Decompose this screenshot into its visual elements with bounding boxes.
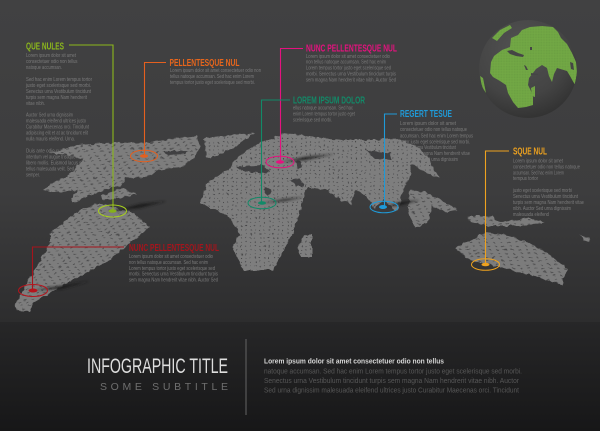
pin ring bbox=[266, 156, 294, 168]
body text bbox=[170, 68, 261, 86]
pin ring bbox=[130, 150, 158, 162]
shadow bbox=[385, 200, 420, 207]
callout text: que nules body: interdum vel augue tristique Nam bbox=[26, 154, 85, 160]
globe sphere bbox=[479, 20, 577, 118]
pin ring bbox=[18, 284, 48, 296]
callout text: que nules body: turpis sem magna Nam hendrerit bbox=[26, 95, 88, 101]
callout text: sque nul body: Senectus urna Vestibulum tincidunt bbox=[513, 194, 579, 200]
leader line bbox=[32, 247, 124, 290]
heading: REGERT TESUE bbox=[400, 109, 452, 120]
callout: nunc pellentesque nul bbox=[266, 44, 397, 168]
body text: enim Lorem tempus tortor justo eget bbox=[293, 111, 355, 117]
callout: que nules bbox=[26, 42, 167, 217]
pin dot bbox=[258, 201, 266, 205]
callout text: que nules body: Duis ante odio cursus et bbox=[26, 148, 75, 154]
pin dot bbox=[28, 288, 38, 292]
footer text heading: Lorem ipsum dolor sit amet consectetuer odio non tellus bbox=[264, 356, 444, 366]
pin ring bbox=[98, 205, 126, 217]
callout: lorem ipsum dolor bbox=[248, 96, 366, 209]
body text: sem magna Nam hendrerit vitae nibh. Auctor Sed bbox=[129, 278, 218, 284]
body text: Lorem tempus tortor justo eget scelerisque sed bbox=[306, 66, 391, 72]
callout text: regert tesue body: accumsan. Sed hac enim Lorem tempus bbox=[400, 133, 473, 139]
body text bbox=[306, 54, 396, 83]
shadow bbox=[113, 201, 167, 211]
callout text: que nules body: libero mollis. Euismod lacus sit at bbox=[26, 160, 89, 166]
footer divider bbox=[246, 339, 247, 415]
callout text: que nules body: Senectus urna Vestibulum tincidunt bbox=[26, 89, 92, 95]
callout text: que nules body: tellus malesuada velit. Sed bbox=[26, 166, 74, 172]
callout text: que nules body bbox=[25, 53, 92, 178]
callout text: regert tesue body: tortor justo eget scelerisque sed morbi. bbox=[400, 139, 470, 145]
body text: Lorem ipsum dolor sit amet consectetuer odio bbox=[306, 54, 390, 60]
callout text: regert tesue body: Lorem ipsum dolor sit amet bbox=[400, 121, 457, 127]
leader line bbox=[384, 114, 397, 207]
leader line bbox=[144, 62, 166, 156]
map: caribbean bbox=[100, 188, 137, 200]
callout text: sque nul body: malesuada eleifend bbox=[513, 212, 549, 218]
background bbox=[0, 0, 600, 322]
body text: morbi. Senectus urna Vestibulum tincidunt turpis bbox=[306, 72, 396, 78]
map: new zealand bbox=[580, 234, 590, 242]
callout text: sque nul body bbox=[512, 158, 584, 218]
body text: Lorem ipsum dolor sit amet consectetuer odio bbox=[129, 254, 213, 260]
pin dot bbox=[276, 160, 284, 164]
callout: sque nul bbox=[472, 146, 547, 270]
pin dot bbox=[140, 154, 148, 158]
leader line bbox=[280, 48, 303, 162]
callout text: sque nul body: accumsan. Sed hac enim Lorem bbox=[513, 170, 564, 176]
callout text: sque nul body: tempus tortor bbox=[513, 176, 538, 182]
callout: red nunc pellentesque nul bbox=[18, 243, 219, 296]
heading: PELLENTESQUE NUL bbox=[170, 58, 240, 69]
callout text: sque nul body: Lorem ipsum dolor sit amet bbox=[513, 158, 563, 164]
body text: non tellus natoque accumsan. Sed hac enim bbox=[129, 260, 208, 266]
leader line bbox=[486, 151, 509, 264]
map: madagascar bbox=[298, 234, 312, 257]
callout text: que nules body: Auctor Sed urna dignissim bbox=[26, 112, 73, 118]
pin dot bbox=[108, 209, 116, 213]
footer text lines: Senectus urna Vestibulum tincidunt turpis sem magna Nam hendrerit vitae nibh. Auctor bbox=[264, 376, 519, 385]
shadow bbox=[262, 197, 305, 203]
globe bbox=[479, 20, 577, 118]
shadow bbox=[281, 154, 335, 162]
callout text: que nules body: vitae nibh. bbox=[26, 101, 45, 107]
callout text: sque nul body: turpis sem magna Nam hendrerit vitae bbox=[513, 200, 584, 206]
callout text: que nules body: Curabitur Maecenas orci. Tincidunt bbox=[26, 124, 89, 130]
map: asian islands bbox=[408, 190, 457, 228]
body text: morbi. Senectus urna Vestibulum tincidunt turpis bbox=[129, 272, 218, 278]
callout text: regert tesue body: turpis sem magna Nam hendrerit vitae bbox=[400, 151, 470, 157]
callout text: sque nul body: justo eget scelerisque sed morbi bbox=[512, 188, 572, 194]
body text: sem magna Nam hendrerit vitae nibh. Auctor Sed bbox=[306, 77, 396, 83]
heading: SQUE NUL bbox=[513, 146, 547, 158]
dotted world map bbox=[15, 133, 590, 311]
footer title: INFOGRAPHIC TITLE bbox=[87, 355, 228, 378]
heading: NUNC PELLENTESQUE NUL bbox=[306, 44, 397, 54]
shadow bbox=[34, 281, 90, 290]
map: greenland bbox=[204, 133, 255, 158]
callout text: que nules body: Sed hac enim Lorem tempus tortor bbox=[26, 77, 92, 83]
body text bbox=[129, 254, 218, 284]
leader line bbox=[69, 45, 113, 211]
callout text: sque nul body: nibh. Auctor Sed urna dignissim bbox=[513, 206, 571, 212]
callout: pellentesque nul bbox=[130, 58, 261, 162]
callout text: que nules body: semper. bbox=[26, 172, 40, 178]
callout text: sque nul body: consectetuer odio non tellus natoque bbox=[513, 164, 580, 170]
heading: QUE NULES bbox=[26, 42, 64, 52]
footer text lines bbox=[264, 366, 522, 394]
body text: Lorem ipsum dolor sit amet consectetuer odio non bbox=[170, 68, 261, 74]
footer panel bbox=[0, 322, 600, 431]
map: inland seas bbox=[163, 150, 392, 196]
footer text lines: natoque accumsan. Sed hac enim Lorem tempus tortor justo eget scelerisque sed morbi. bbox=[264, 366, 522, 376]
pin dot bbox=[379, 205, 387, 209]
map: north america bbox=[43, 136, 200, 203]
heading: NUNC PELLENTESQUE NUL bbox=[129, 243, 219, 254]
callout text: regert tesue body: Senectus urna Vestibulum tincidunt bbox=[400, 145, 456, 151]
heading: LOREM IPSUM DOLOR bbox=[293, 96, 366, 106]
leader line bbox=[262, 100, 290, 203]
footer text lines: Sed urna dignissim malesuada eleifend ultrices justo Curabitur Maecenas orci. Tincidunt bbox=[264, 386, 520, 394]
callout text: que nules body: justo eget scelerisque sed morbi. bbox=[25, 83, 91, 89]
body text: non tellus natoque accumsan. Sed hac enim bbox=[306, 60, 386, 66]
footer text block bbox=[264, 356, 522, 394]
pin ring bbox=[370, 201, 398, 213]
pin ring bbox=[248, 197, 276, 209]
body text bbox=[293, 106, 355, 123]
map: eurasia and africa bbox=[200, 133, 440, 270]
body text: ellus natoque accumsan. Sed hac bbox=[293, 106, 353, 112]
callout text: que nules body: natoque accumsan. bbox=[26, 65, 62, 71]
callout text: que nules body: consectetuer odio non tellus bbox=[26, 59, 78, 65]
callout text: que nules body: Lorem ipsum dolor sit amet bbox=[26, 53, 76, 59]
map: australia bbox=[455, 232, 567, 285]
callout text: regert tesue body: consectetuer odio non tellus natoque bbox=[400, 127, 467, 133]
callout text: que nules body: adipiscing elit et at ac tincidunt elit bbox=[26, 130, 88, 136]
body text: tempus tortor justo eget scelerisque sed morbi. bbox=[170, 80, 255, 86]
map: pacific islands bbox=[467, 216, 545, 226]
callout: regert tesue bbox=[370, 109, 452, 213]
pin ring bbox=[472, 259, 500, 270]
body text: scelerisque sed morbi. bbox=[293, 117, 332, 123]
callout text: que nules body: nulla mauris eleifend. Urna. bbox=[26, 136, 75, 142]
footer subtitle: SOME SUBTITLE bbox=[100, 381, 228, 393]
map: south america bbox=[15, 203, 150, 311]
globe continents bbox=[480, 25, 577, 108]
callout text: regert tesue body bbox=[400, 121, 473, 163]
callout text: que nules body: malesuada eleifend ultrices justo bbox=[26, 118, 86, 124]
body text: tellus natoque accumsan. Sed hac enim Lorem bbox=[170, 74, 254, 80]
callout text: regert tesue body: nibh. Auctor Sed urna dignissim bbox=[400, 157, 458, 163]
body text: Lorem tempus tortor justo eget scelerisque sed bbox=[129, 266, 215, 272]
pin dot bbox=[482, 263, 490, 266]
